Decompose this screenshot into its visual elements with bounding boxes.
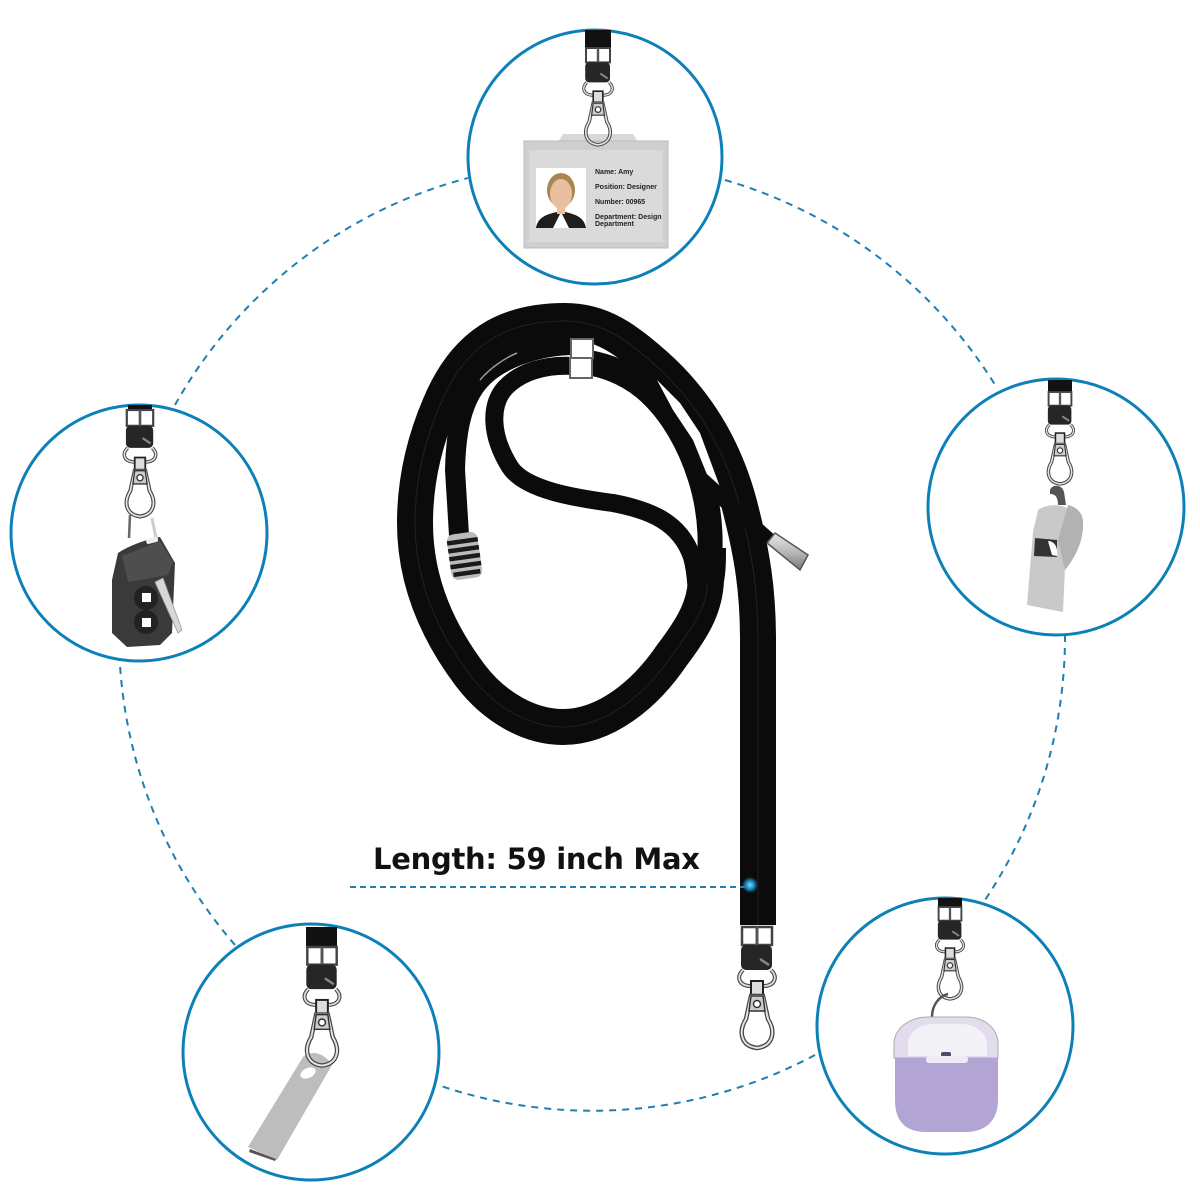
S-shaped inner cord [494,366,697,618]
circle outline [928,379,1184,635]
metal clip on the cords [570,339,593,378]
strap stub [128,405,152,411]
dashed ring connecting the use cases [120,178,1065,1111]
icon: USB drive [248,1053,332,1161]
cord seam highlights [415,321,758,925]
photo [536,168,586,228]
marker dot on strap [742,877,758,893]
circle outline [468,30,722,284]
badge holder [524,134,668,248]
icon: key fob [112,515,182,647]
dashed leader line [350,886,745,888]
badge details text: Name: Amy [595,169,633,176]
hardware [305,947,339,1066]
hardware [1046,392,1074,484]
icon: whistle [1027,486,1083,612]
main double cord loop and strap [415,321,758,925]
panel: AirPods case [817,898,1073,1154]
white gap between cords [657,380,720,487]
panel: whistle [928,379,1184,635]
strap hardware: clamp, swivel and hook [739,927,775,1048]
strap stub [306,927,337,948]
circle outline [183,924,439,1180]
strap stub [1048,380,1072,393]
badge details text: Position: Designer [595,184,657,191]
panel: car key fob [11,405,267,661]
callout: length label [350,842,758,893]
grey gap on upper left [480,353,517,380]
badge details text: Number: 00965 [595,199,645,206]
circle outline [817,898,1073,1154]
hardware [936,907,964,999]
circle outline [11,405,267,661]
third cord ending in ribbed tip [455,345,575,535]
hardware [584,48,612,145]
hardware [124,410,156,516]
badge details text: Department [595,221,635,228]
inner right cord rising to the clip [585,362,710,600]
ribbed metal cord tip [446,531,483,581]
lanyard: coiled black cord with strap and hook [415,321,808,1048]
icon: earbud case [894,994,998,1132]
strap stub [585,30,611,48]
length text: Length: 59 inch Max [373,842,700,876]
badge details text [595,169,662,228]
strap stub [938,898,962,908]
metal end cap [767,533,808,570]
diagonal cord end [700,478,770,541]
panel: USB flash drive [183,924,439,1180]
badge details text: Department: Design [595,214,662,221]
panel: ID badge [468,30,722,284]
